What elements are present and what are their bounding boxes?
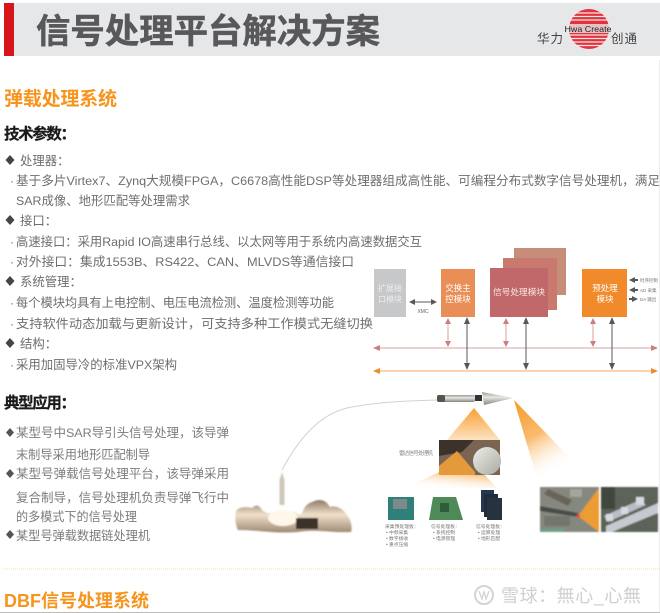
typical applications list: 某型号弹载数据链处理机 bbox=[16, 528, 151, 543]
section heading: 弹载处理系统: 弹载处理系统 bbox=[4, 87, 117, 110]
board 3 with caption: • 地形匹配 bbox=[478, 535, 500, 542]
architecture block diagram bbox=[373, 248, 658, 374]
external IO labels bbox=[629, 277, 658, 303]
bottom edge bbox=[0, 612, 660, 613]
missile bbox=[437, 392, 513, 405]
icon: watermark logo bbox=[475, 586, 493, 604]
right edge line bbox=[658, 60, 660, 612]
technical parameters list: · bbox=[10, 296, 14, 310]
sensor cone below radar photo bbox=[405, 472, 497, 488]
typical applications list bbox=[6, 425, 229, 543]
sensor cone to ground bbox=[514, 400, 572, 482]
watermark: 雪球：無心_心無 bbox=[501, 586, 641, 607]
section heading: DBF信号处理系统: DBF信号处理系统 bbox=[4, 590, 149, 611]
board 2 with caption: • 系统控制 bbox=[433, 529, 455, 536]
board 2 with caption: 信号处理板： bbox=[431, 523, 460, 530]
dotted divider bbox=[3, 568, 660, 570]
module: 交换主控模块: 交换主 bbox=[445, 283, 471, 293]
module: 扩展接口模块 bbox=[374, 269, 406, 317]
technical parameters list: · bbox=[10, 317, 14, 331]
logo: Hwa Create: Hwa Create bbox=[564, 24, 612, 34]
external IO labels: DA 输出 bbox=[640, 296, 657, 303]
heading: 技术参数: 技术参数： bbox=[4, 124, 76, 143]
technical parameters list: 高速接口：采用Rapid IO高速串行总线、以太网等用于系统内高速数据交互 bbox=[16, 234, 422, 249]
technical parameters list: 系统管理： bbox=[20, 274, 82, 289]
board 1 with caption: • 重点压缩 bbox=[386, 541, 408, 548]
logo: Hwa Create: 华力 bbox=[537, 31, 563, 46]
technical parameters list: 结构： bbox=[20, 336, 57, 351]
title: 信号处理平台解决方案 bbox=[36, 13, 380, 51]
external IO labels: 时序控制 bbox=[640, 277, 658, 284]
rocket launch photo bbox=[235, 472, 352, 533]
technical parameters list: SAR成像、地形匹配等处理需求 bbox=[16, 193, 190, 208]
module: 交换主控模块: 控模块 bbox=[445, 294, 471, 304]
typical applications list: 的多模式下的信号处理 bbox=[16, 509, 137, 524]
caption: radar signal processor: 雷达信号处理机 bbox=[399, 449, 433, 457]
vertical pink connectors bbox=[445, 318, 596, 347]
technical parameters list: · bbox=[10, 235, 14, 249]
technical parameters list: 对外接口：集成1553B、RS422、CAN、MLVDS等通信接口 bbox=[16, 254, 354, 269]
module: 预处理模块: 预处理 bbox=[592, 283, 618, 293]
aerial building photo bbox=[601, 487, 658, 532]
technical parameters list: 接口： bbox=[20, 213, 57, 228]
typical applications list: 某型号弹载信号处理平台，该导弹采用 bbox=[16, 466, 229, 481]
heading: 典型应用: 典型应用： bbox=[4, 393, 76, 412]
board 1 with caption: • 数字接收 bbox=[386, 535, 408, 542]
board 1 with caption: • 中频采集 bbox=[386, 529, 408, 536]
typical applications list: 末制导采用地形匹配制导 bbox=[16, 448, 150, 462]
pink bus arrow bbox=[373, 345, 658, 351]
board 3 with caption: • 运算处理 bbox=[478, 529, 500, 536]
header banner bbox=[4, 3, 660, 56]
technical parameters list bbox=[6, 154, 660, 372]
radar processor photo bbox=[439, 440, 501, 475]
module: 交换主控模块 bbox=[441, 269, 475, 317]
typical applications list: 复合制导，信号处理机负责导弹飞行中 bbox=[16, 490, 229, 505]
typical applications list: 某型号中SAR导引头信号处理，该导弹 bbox=[16, 425, 229, 440]
board 1 with caption bbox=[385, 497, 419, 548]
logo: Hwa Create: 创通 bbox=[611, 32, 637, 46]
module: 扩展接口模块: 扩展接 bbox=[378, 283, 402, 293]
external IO labels: AD 采集 bbox=[640, 287, 657, 294]
board 3 with caption: 信号处理板： bbox=[476, 523, 505, 530]
technical parameters list: · bbox=[10, 358, 14, 372]
technical parameters list: 处理器： bbox=[20, 154, 70, 168]
board 3 with caption bbox=[476, 490, 505, 542]
board 2 with caption: • 电源管理 bbox=[433, 535, 455, 542]
arrow: XMC link bbox=[409, 299, 437, 315]
arrow: XMC link: XMC bbox=[417, 309, 429, 315]
technical parameters list: 采用加固导冷的标准VPX架构 bbox=[16, 357, 177, 372]
module: 信号处理模块 stack: 信号处理模块 bbox=[493, 286, 545, 297]
module: 信号处理模块 stack bbox=[490, 248, 566, 317]
technical parameters list: 每个模块均具有上电控制、电压电流检测、温度检测等功能 bbox=[16, 295, 334, 310]
board 2 with caption bbox=[429, 497, 463, 542]
sensor cone to radar bbox=[447, 408, 500, 440]
technical parameters list: 支持软件动态加载与更新设计，可支持多种工作模式无缝切换 bbox=[16, 316, 373, 331]
board 1 with caption: 采集预处理板： bbox=[385, 523, 419, 530]
technical parameters list: · bbox=[10, 174, 14, 188]
satellite image with scan cone bbox=[540, 487, 599, 532]
module: 预处理模块 bbox=[582, 269, 627, 317]
technical parameters list: · bbox=[10, 255, 14, 269]
technical parameters list: 基于多片Virtex7、Zynq大规模FPGA，C6678高性能DSP等处理器组成高性能、可编程分布式数字信号处理机，满足 bbox=[16, 173, 660, 188]
module: 扩展接口模块: 口模块 bbox=[378, 294, 402, 304]
module: 预处理模块: 模块 bbox=[596, 294, 614, 304]
flight trajectory bbox=[282, 400, 437, 470]
logo: Hwa Create bbox=[537, 9, 637, 49]
vertical dark connectors bbox=[464, 317, 615, 370]
orange bus arrow bbox=[373, 368, 658, 374]
